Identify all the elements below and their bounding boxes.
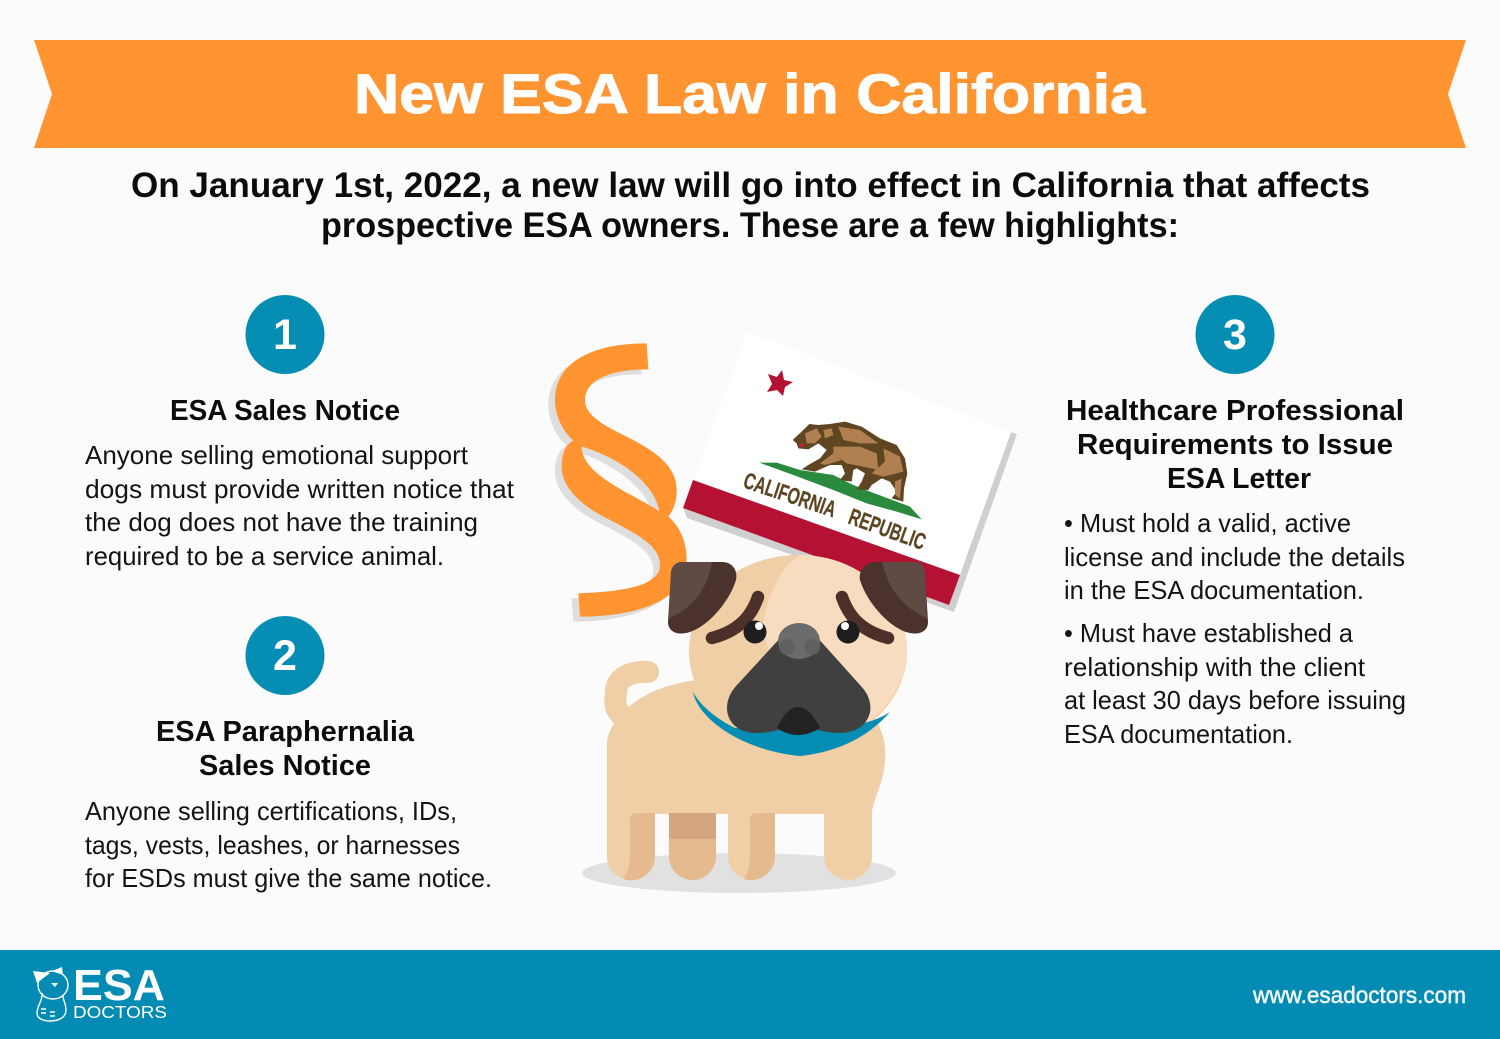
legs <box>607 790 872 880</box>
heading 3 <box>1066 395 1404 495</box>
panel: ESA sales notice <box>85 295 515 571</box>
bullet: relationship: • Must have established a <box>1064 618 1354 648</box>
bullet: relationship: ESA documentation. <box>1064 719 1293 749</box>
flag ground <box>759 463 922 519</box>
number badge 3: 3 <box>1223 311 1247 359</box>
flag lettering <box>740 467 929 555</box>
number badge 2: 2 <box>273 632 297 680</box>
subtitle <box>131 166 1370 245</box>
number badge 1: 1 <box>273 311 297 359</box>
heading 3: ESA Letter <box>1167 463 1311 495</box>
logo wordmark: DOCTORS <box>73 1002 167 1022</box>
nose <box>778 623 820 659</box>
body text 1: dogs must provide written notice that <box>85 474 515 504</box>
bullet: license: license and include the details <box>1064 542 1405 572</box>
bullet: relationship <box>1064 618 1406 749</box>
heading 2: ESA Paraphernalia <box>156 716 415 748</box>
flag stripe <box>683 480 960 605</box>
icon: section sign <box>548 343 687 622</box>
body text 1 <box>85 440 515 571</box>
head <box>689 555 907 747</box>
number badge 3 <box>1196 295 1274 374</box>
flag bear <box>793 422 907 502</box>
flag field <box>683 332 1011 605</box>
ground shadow <box>582 853 896 893</box>
subtitle: On January 1st, 2022, a new law will go into effect in California that affects <box>131 166 1370 205</box>
bullet: license: in the ESA documentation. <box>1064 575 1364 605</box>
flag shadow <box>683 432 1017 612</box>
bullet: relationship: relationship with the client <box>1064 652 1366 682</box>
left ear <box>668 562 736 634</box>
heading 1: ESA Sales Notice <box>170 395 400 427</box>
brows <box>712 597 888 638</box>
flag ground and bear <box>759 422 922 519</box>
muzzle <box>727 636 870 733</box>
title banner: New ESA Law in California <box>354 62 1146 125</box>
illustration: pug <box>582 555 928 893</box>
body text 1: the dog does not have the training <box>85 507 478 537</box>
panel: ESA paraphernalia sales notice <box>85 616 492 893</box>
body text 2: for ESDs must give the same notice. <box>85 863 492 893</box>
heading 2 <box>156 716 415 782</box>
number badge 1 <box>246 295 324 374</box>
number badge 2 <box>246 616 324 695</box>
logo <box>33 961 167 1022</box>
body text 2 <box>85 796 492 893</box>
body text 2: tags, vests, leashes, or harnesses <box>85 830 460 860</box>
heading 3: Healthcare Professional <box>1066 395 1404 427</box>
body text 1: Anyone selling emotional support <box>85 440 469 470</box>
bullet: license <box>1064 508 1405 605</box>
right ear <box>860 562 928 634</box>
eyes <box>744 620 860 644</box>
logo dog icon <box>33 967 68 1021</box>
flag star <box>767 370 793 396</box>
panel: healthcare professional requirements <box>1064 295 1406 749</box>
mouth <box>777 707 820 735</box>
flag lettering: REPUBLIC <box>845 503 929 555</box>
logo wordmark: ESA <box>73 961 165 1010</box>
heading 3: Requirements to Issue <box>1077 429 1393 461</box>
bullet: relationship: at least 30 days before issuing <box>1064 685 1406 715</box>
collar <box>693 692 890 756</box>
heading 2: Sales Notice <box>199 750 371 782</box>
subtitle: prospective ESA owners. These are a few highlights: <box>321 206 1179 245</box>
tail <box>615 672 648 716</box>
icon: California flag <box>683 332 1017 612</box>
title banner <box>34 40 1466 148</box>
bullet: license: • Must hold a valid, active <box>1064 508 1351 538</box>
flag lettering: CALIFORNIA <box>740 467 840 522</box>
website url: www.esadoctors.com <box>1252 982 1466 1008</box>
body text 2: Anyone selling certifications, IDs, <box>85 796 457 826</box>
footer bar <box>0 950 1500 1039</box>
body text 1: required to be a service animal. <box>85 541 444 571</box>
body <box>607 680 885 814</box>
